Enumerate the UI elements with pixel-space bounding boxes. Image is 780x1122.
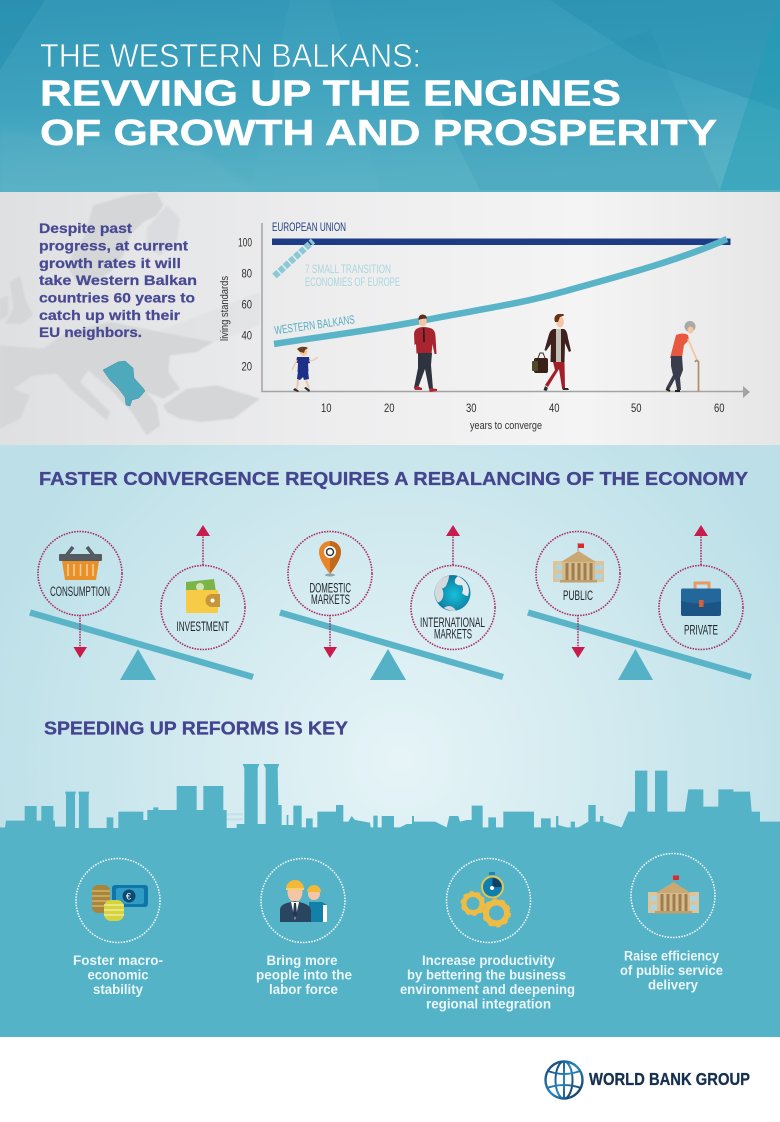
label: macroeconomic stability: Foster macro- <box>73 953 163 968</box>
circle: investment <box>161 566 245 650</box>
header panel <box>0 0 780 192</box>
Western Balkans curve <box>273 239 727 344</box>
label: domestic markets: MARKETS <box>311 592 350 607</box>
figure: child <box>292 347 318 392</box>
label: domestic markets <box>310 580 351 607</box>
text block: intro: catch up with their <box>39 307 181 323</box>
reform: public service delivery <box>620 854 723 992</box>
x axis labels: 50 <box>631 401 642 415</box>
text block: intro: Despite past <box>39 220 132 236</box>
European Union line <box>272 222 730 245</box>
label: domestic markets: DOMESTIC <box>310 580 351 596</box>
panel: convergence chart <box>0 192 780 445</box>
figure: elderly person <box>666 321 698 392</box>
balance: public versus private <box>527 525 752 680</box>
x axis title: years to converge <box>470 420 542 432</box>
y axis labels: 80 <box>242 266 252 280</box>
figure: young adult <box>414 314 437 392</box>
label: public service delivery: delivery <box>648 978 698 992</box>
text block: intro: countries 60 years to <box>39 290 195 306</box>
circle: international markets <box>411 566 495 650</box>
circle: investment: INVESTMENT <box>176 619 229 634</box>
panel: industrial skyline and reforms <box>0 764 780 1037</box>
label: labor force: Bring more <box>266 953 338 968</box>
figure: adult with bag <box>532 314 571 391</box>
y axis labels: 100 <box>238 236 252 250</box>
circle: domestic markets <box>288 532 372 616</box>
text block: intro: growth rates it will <box>39 255 181 271</box>
label: international markets: INTERNATIONAL <box>420 615 485 630</box>
label: international markets <box>420 615 485 642</box>
label: public service delivery <box>620 948 723 992</box>
text block: intro <box>39 220 197 340</box>
icon: briefcase <box>681 583 721 616</box>
x axis labels: 40 <box>549 401 560 415</box>
label: macroeconomic stability <box>73 953 163 997</box>
icon: public building <box>553 543 604 582</box>
y axis labels: 60 <box>242 298 252 312</box>
x axis labels: 10 <box>321 401 332 415</box>
7 small transition economies line: ECONOMIES OF EUROPE <box>305 277 400 289</box>
arrow: domestic markets down <box>324 615 337 658</box>
circle: private: PRIVATE <box>684 622 718 638</box>
y axis labels: 20 <box>242 360 252 374</box>
circle: private <box>659 566 743 650</box>
footer background <box>0 1037 780 1122</box>
heading: speeding up reforms: SPEEDING UP REFORMS IS KEY <box>44 718 349 738</box>
logo: World Bank Group: WORLD BANK GROUP <box>589 1069 750 1089</box>
label: macroeconomic stability: economic <box>88 968 149 982</box>
title: OF GROWTH AND PROSPERITY <box>40 112 717 153</box>
icon: coins and banknote: € <box>126 892 131 902</box>
text block: intro: progress, at current <box>39 238 188 254</box>
x axis labels <box>321 401 725 415</box>
label: international markets: MARKETS <box>434 626 472 642</box>
title: THE WESTERN BALKANS: <box>40 37 421 74</box>
icon: workers <box>280 880 327 922</box>
y axis title: living standards <box>219 276 231 341</box>
label: productivity: environment and deepening <box>400 982 575 997</box>
logo: World Bank Group <box>546 1062 750 1098</box>
label: productivity: regional integration <box>426 996 551 1012</box>
label: macroeconomic stability: stability <box>93 982 143 997</box>
reform: macroeconomic stability <box>73 858 163 997</box>
circle: public: PUBLIC <box>563 588 593 603</box>
circle: consumption <box>38 532 122 616</box>
reform: productivity <box>400 858 575 1012</box>
7 small transition economies line: 7 SMALL TRANSITION <box>305 264 391 276</box>
balance: domestic versus international markets <box>279 525 504 680</box>
chart axes <box>262 223 750 398</box>
x axis labels: 30 <box>466 401 477 415</box>
arrow: consumption down <box>74 615 87 658</box>
icon: globe logo <box>546 1062 582 1098</box>
Western Balkans curve: WESTERN BALKANS <box>273 312 356 337</box>
7 small transition economies line <box>274 241 400 289</box>
skyline <box>0 764 780 833</box>
arrow: public down <box>572 615 585 658</box>
reform: labor force <box>256 858 352 997</box>
icon: globe <box>434 575 470 611</box>
y axis labels <box>238 236 252 374</box>
text block: intro: EU neighbors. <box>39 324 142 340</box>
circle: consumption: CONSUMPTION <box>50 584 110 599</box>
icon: public building <box>648 875 699 914</box>
circle: public <box>536 532 620 616</box>
label: productivity <box>400 953 575 1012</box>
label: labor force: people into the <box>256 968 352 982</box>
x axis labels: 60 <box>714 401 725 415</box>
title <box>40 37 717 153</box>
balance: consumption versus investment <box>29 525 254 680</box>
heading: faster convergence: FASTER CONVERGENCE REQUIRES A REBALANCING OF THE ECONOMY <box>39 468 749 489</box>
panel: rebalancing and reforms background <box>0 445 780 845</box>
icon: location pin <box>319 541 341 576</box>
icon: basket <box>59 547 102 580</box>
label: labor force: labor force <box>269 982 338 997</box>
x axis labels: 20 <box>384 401 395 415</box>
y axis labels: 40 <box>242 328 252 342</box>
arrow: private up <box>694 525 708 565</box>
arrow: international markets up <box>446 525 460 565</box>
icon: wallet <box>186 579 220 613</box>
label: public service delivery: Raise efficiency <box>624 948 719 964</box>
map of Europe <box>0 192 260 435</box>
label: productivity: by bettering the business <box>407 968 566 982</box>
label: public service delivery: of public service <box>620 963 723 978</box>
arrow: investment up <box>196 525 210 565</box>
European Union line: EUROPEAN UNION <box>272 222 346 234</box>
icon: stopwatch and gears <box>462 872 510 926</box>
label: labor force <box>256 953 352 997</box>
title: REVVING UP THE ENGINES <box>40 72 621 114</box>
icon: Western Balkans map <box>103 361 145 406</box>
label: productivity: Increase productivity <box>422 953 555 968</box>
text block: intro: take Western Balkan <box>39 272 197 288</box>
